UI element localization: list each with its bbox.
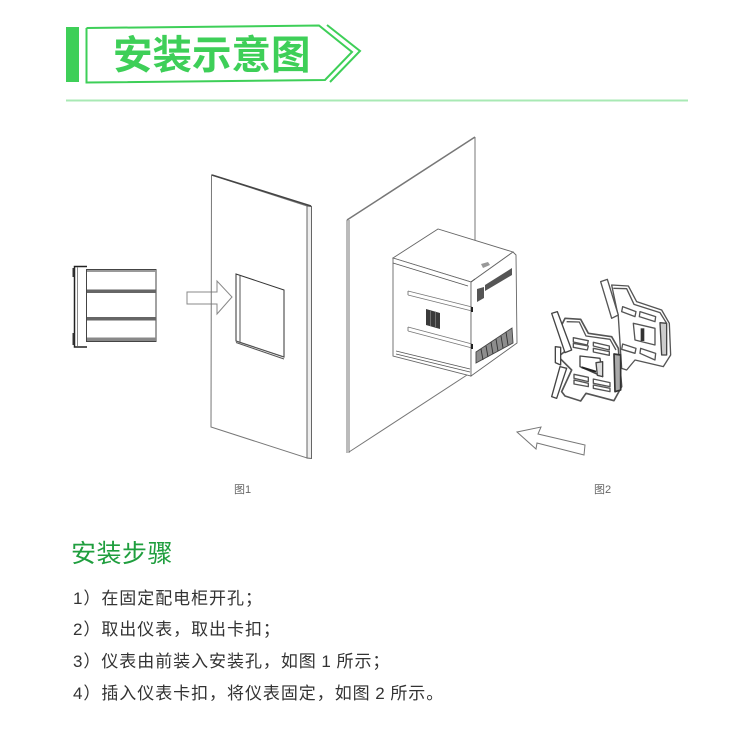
figure 1 caption: 图1 bbox=[234, 484, 251, 496]
figure 1: insertion arrow bbox=[187, 281, 232, 314]
figure 1: meter side view bbox=[72, 266, 156, 347]
step 1: 1）在固定配电柜开孔； bbox=[73, 589, 263, 608]
step 2: 2）取出仪表，取出卡扣； bbox=[73, 620, 281, 639]
steps heading: 安装步骤 bbox=[71, 540, 173, 568]
back clip bbox=[601, 279, 671, 370]
figure 2: meter body bbox=[393, 229, 517, 376]
step 4: 4）插入仪表卡扣，将仪表固定，如图 2 所示。 bbox=[73, 684, 444, 703]
step 3: 3）仪表由前装入安装孔，如图 1 所示； bbox=[73, 652, 390, 671]
figure 2: cabinet panel bbox=[347, 137, 475, 453]
header banner bbox=[66, 24, 688, 102]
figure 2: mounting clips bbox=[552, 279, 671, 401]
figure 1: cabinet panel with cutout bbox=[211, 175, 312, 458]
figure 2: insertion arrow bbox=[517, 427, 585, 455]
title: 安装示意图 bbox=[113, 34, 310, 78]
front clip bbox=[552, 312, 622, 401]
figure 2 caption: 图2 bbox=[594, 484, 611, 496]
